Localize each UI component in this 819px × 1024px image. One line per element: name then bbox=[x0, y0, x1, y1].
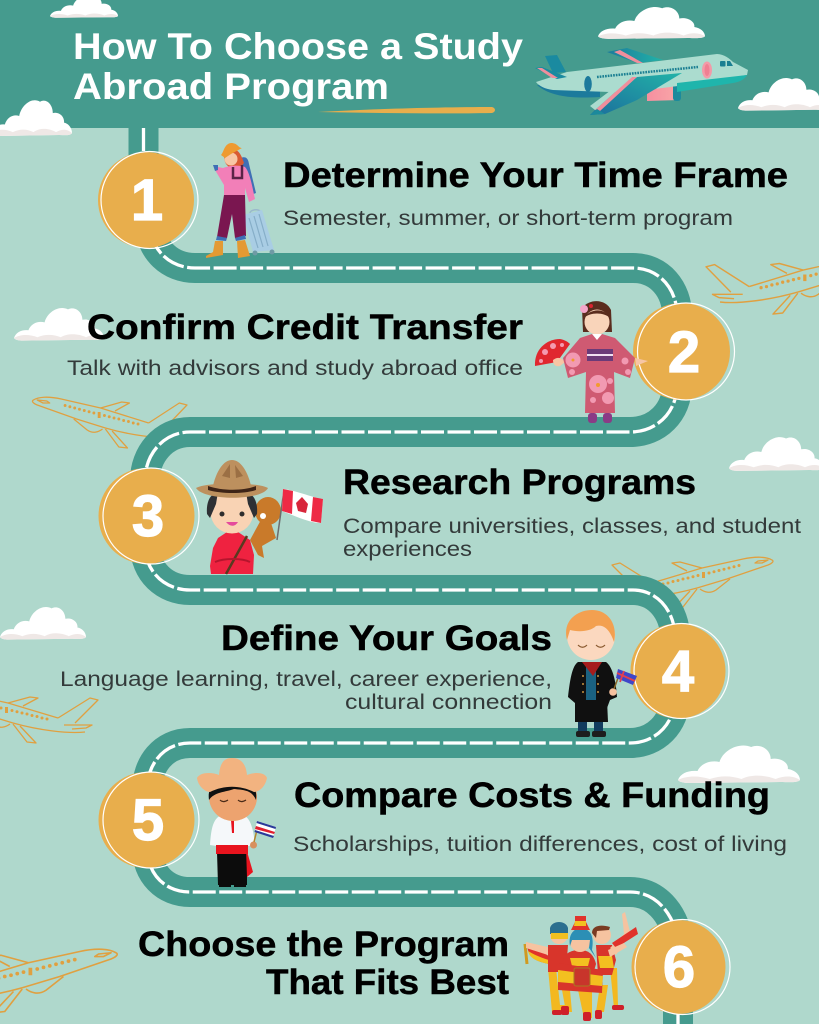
woman in kimono with fan bbox=[535, 301, 648, 423]
badge 6 bbox=[632, 920, 730, 1014]
decorative plane outline right of step 2 bbox=[706, 258, 819, 314]
step 5 bbox=[98, 758, 787, 887]
airplane illustration bbox=[535, 48, 748, 115]
description 1: Semester, summer, or short-term program bbox=[283, 206, 733, 230]
winding road bbox=[144, 128, 678, 1024]
cloud step 4 bbox=[0, 607, 86, 640]
heading 6 bbox=[138, 925, 509, 1002]
step 2 bbox=[67, 301, 734, 423]
heading 2: Confirm Credit Transfer bbox=[87, 308, 523, 347]
description 5: Scholarships, tuition differences, cost of living bbox=[293, 832, 787, 856]
description 3 bbox=[343, 514, 801, 561]
header band bbox=[0, 0, 819, 128]
badge 6: 6 bbox=[663, 935, 695, 1000]
heading 6: Choose the Program bbox=[138, 925, 509, 964]
cloud header left bbox=[0, 100, 72, 136]
badge 5 bbox=[98, 772, 199, 868]
cloud step 3 bbox=[729, 437, 819, 471]
cloud step 2 bbox=[14, 308, 104, 341]
cloud far right bbox=[738, 78, 819, 111]
title: How To Choose a Study bbox=[73, 26, 523, 67]
step 1 bbox=[98, 143, 788, 258]
heading 6: That Fits Best bbox=[266, 963, 509, 1002]
badge 2: 2 bbox=[668, 320, 700, 385]
heading 4: Define Your Goals bbox=[221, 619, 552, 658]
decorative plane outline left of step 4 bbox=[0, 692, 98, 743]
title: Abroad Program bbox=[73, 66, 389, 107]
Costa Rican boy in hat with flag bbox=[197, 758, 276, 887]
badge 2 bbox=[633, 303, 734, 400]
decorative plane outline left of step 3 bbox=[32, 397, 187, 448]
heading 1: Determine Your Time Frame bbox=[283, 156, 788, 195]
badge 5: 5 bbox=[132, 788, 164, 853]
step 3 bbox=[98, 460, 801, 574]
badge 3 bbox=[98, 468, 199, 564]
decorative plane outline above step 4 bbox=[612, 557, 773, 608]
heading 5: Compare Costs & Funding bbox=[294, 776, 770, 815]
description 2: Talk with advisors and study abroad office bbox=[67, 356, 523, 380]
decorative plane outline beside step 6 bbox=[0, 949, 117, 1013]
step 4 bbox=[60, 610, 729, 737]
traveler girl with suitcase bbox=[206, 143, 274, 258]
step 6 bbox=[138, 912, 730, 1021]
badge 3: 3 bbox=[132, 484, 164, 549]
cloud header right bbox=[598, 7, 705, 39]
cloud top bbox=[50, 0, 118, 18]
description 3: Compare universities, classes, and student bbox=[343, 514, 801, 538]
title bbox=[73, 26, 523, 107]
description 4: Language learning, travel, career experience, bbox=[60, 667, 552, 691]
Spanish football fans with flag bbox=[525, 912, 638, 1021]
heading 3: Research Programs bbox=[343, 463, 696, 502]
badge 1 bbox=[98, 152, 198, 248]
badge 4: 4 bbox=[662, 639, 694, 704]
cloud step 5 bbox=[678, 745, 800, 783]
title underline brush stroke bbox=[318, 107, 495, 113]
description 4: cultural connection bbox=[345, 690, 552, 714]
badge 1: 1 bbox=[131, 168, 163, 233]
badge 4 bbox=[630, 624, 729, 718]
description 3: experiences bbox=[343, 537, 472, 561]
Canadian mountie with beaver and flag bbox=[196, 460, 323, 574]
description 4 bbox=[60, 667, 552, 714]
boy in Icelandic costume with flag bbox=[566, 610, 637, 737]
